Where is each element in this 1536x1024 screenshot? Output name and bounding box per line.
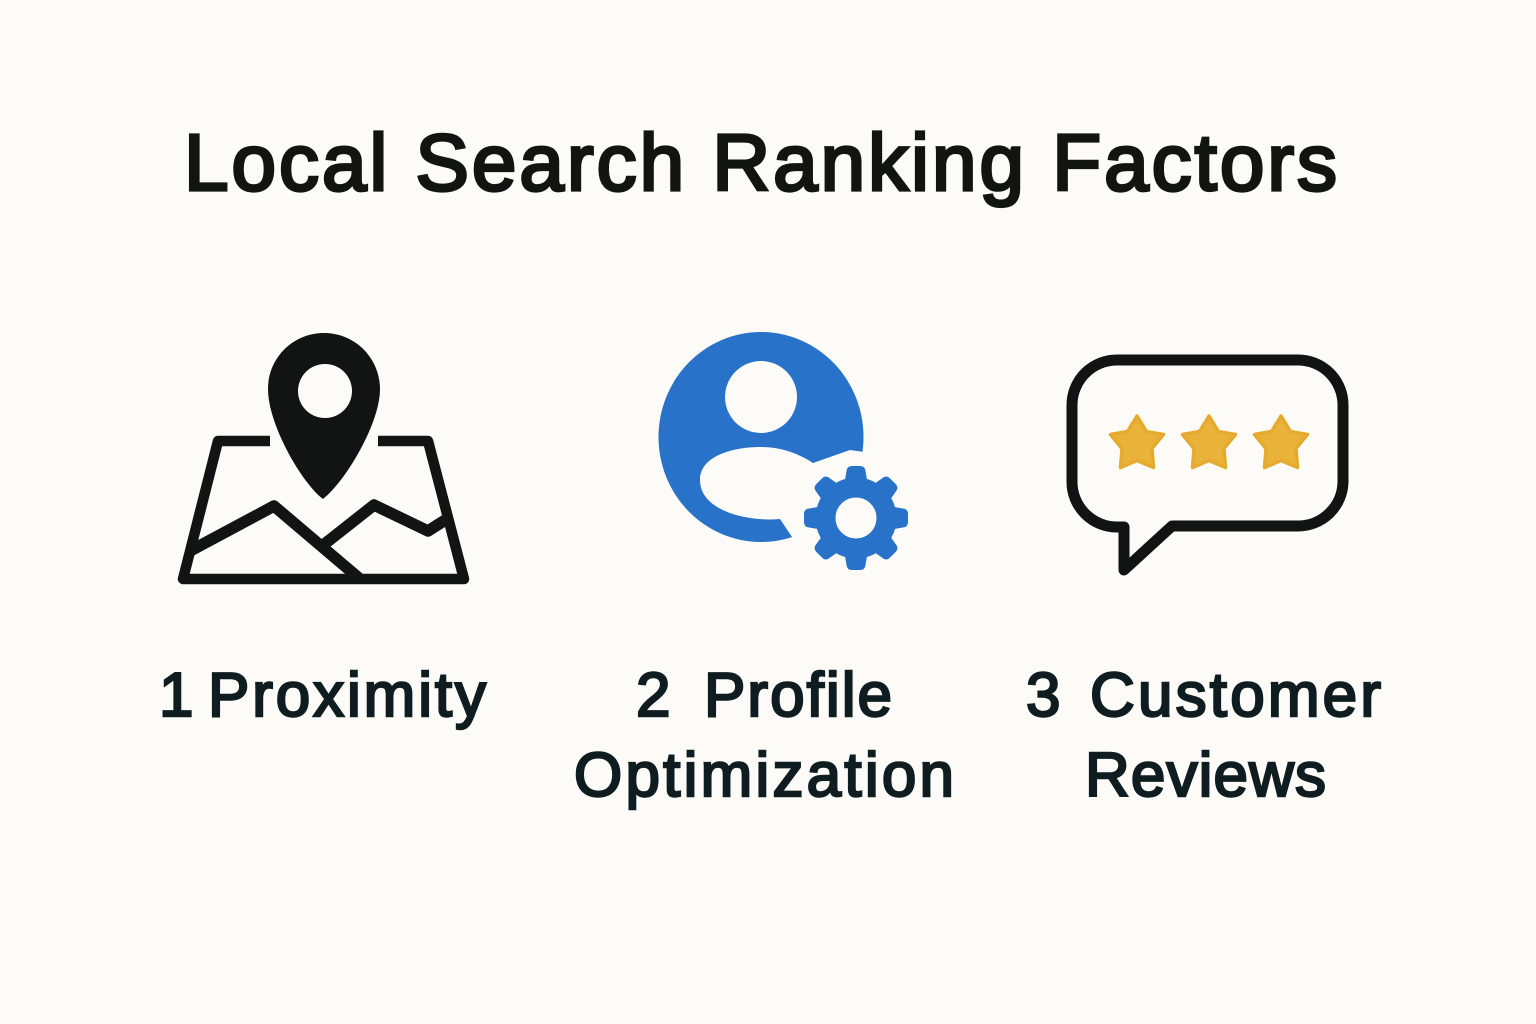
panel: profile optimization [574, 332, 954, 810]
label: 1 Proximity: Proximity [208, 661, 486, 730]
panel: customer reviews [1026, 360, 1381, 810]
icon: speech bubble with stars [1072, 360, 1343, 570]
label: 3 Customer Reviews: Customer [1090, 661, 1381, 730]
panel: proximity [159, 333, 486, 730]
label: 3 Customer Reviews: Reviews [1085, 741, 1326, 810]
label: 2 Profile Optimization [574, 661, 954, 810]
label: 2 Profile Optimization: Optimization [574, 741, 954, 810]
label: 3 Customer Reviews [1026, 661, 1381, 810]
label: 2 Profile Optimization: Profile [704, 661, 892, 730]
label: 3 Customer Reviews: 3 [1026, 661, 1060, 730]
title: Local Search Ranking Factors [184, 118, 1337, 207]
icon: map with location pin [183, 333, 464, 579]
label: 1 Proximity: 1 [159, 661, 193, 730]
icon: user profile with gear [658, 332, 908, 570]
label: 2 Profile Optimization: 2 [636, 661, 670, 730]
